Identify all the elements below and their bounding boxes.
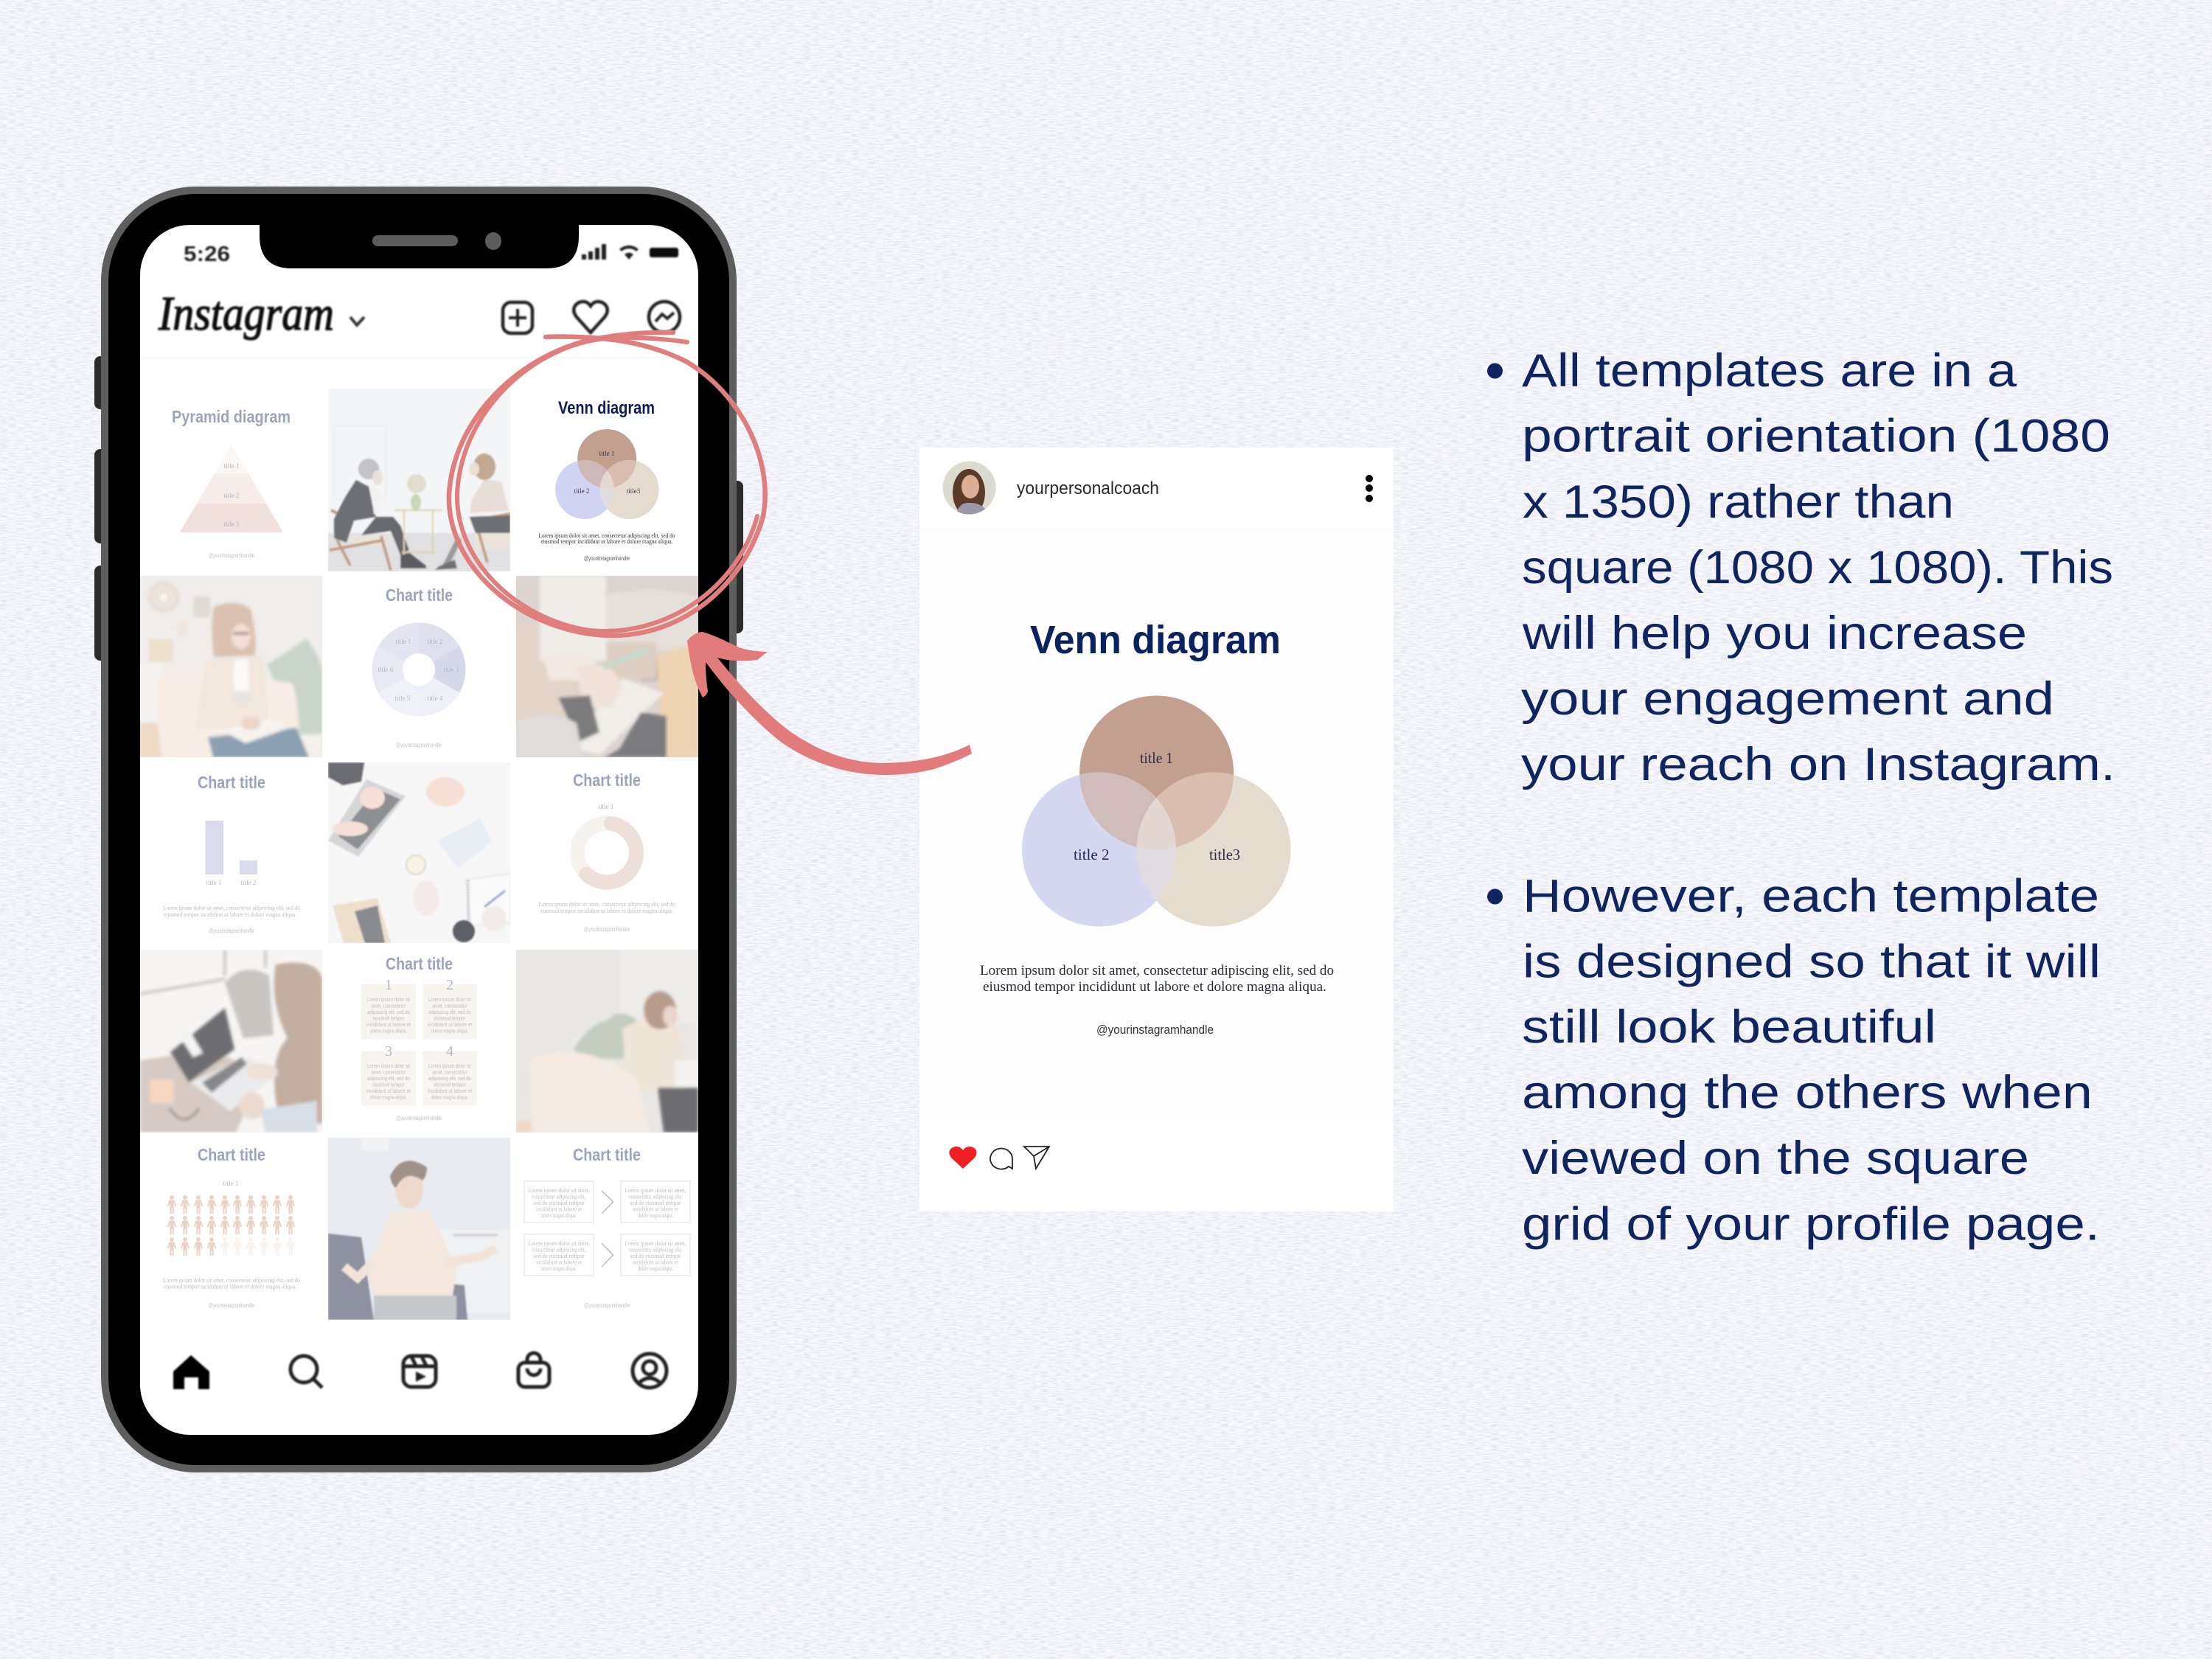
cell: progress ring: Lorem ipsum dolor sit amet, consectetur adipiscing elit, sed do — [538, 901, 675, 908]
cell: process boxes: incididunt ut labore et — [633, 1259, 679, 1265]
cell: donut chart — [372, 585, 466, 748]
bullet point one: your reach on Instagram. — [1521, 739, 2115, 790]
icon: profile — [633, 1354, 667, 1388]
hand-drawn circle highlight — [449, 333, 765, 636]
cell: process boxes: incididunt ut labore et — [536, 1259, 582, 1265]
bullet point two: is designed so that it will — [1523, 936, 2101, 988]
template grid — [140, 389, 698, 1320]
cell: progress ring: title 1 — [599, 803, 613, 810]
cell: process boxes: consectetur adipiscing elit, — [532, 1193, 585, 1200]
cell: pyramid diagram — [172, 407, 291, 559]
cell: process boxes: sed do eiusmod tempor — [630, 1200, 681, 1206]
cell: numbered boxes: adipiscing elit, sed do — [367, 1010, 410, 1015]
bullet point one — [1487, 345, 2115, 790]
cell: process boxes: @yourinstagramhandle — [584, 1301, 630, 1309]
notch — [260, 221, 579, 268]
cell: process boxes: Lorem ipsum dolor sit amet, — [528, 1187, 590, 1194]
cell: bar chart — [163, 773, 300, 934]
cell: process boxes: Lorem ipsum dolor sit amet, — [625, 1187, 686, 1194]
cell: bar chart: eiusmod tempor incididunt ut labore et dolore magna aliqua. — [164, 911, 296, 918]
cell: numbered boxes: 1 — [385, 977, 392, 993]
cell: process boxes — [524, 1145, 690, 1309]
cell: process boxes: Lorem ipsum dolor sit amet, — [528, 1240, 590, 1247]
icon: send — [1024, 1147, 1049, 1169]
icon: search — [291, 1356, 322, 1388]
cell: progress ring: eiusmod tempor incididunt ut labore et dolore magna aliqua. — [540, 908, 673, 914]
post caption: eiusmod tempor incididunt ut labore et dolore magna aliqua. — [983, 980, 1326, 995]
cell: bar chart: Chart title — [198, 773, 265, 792]
cell: process boxes: sed do eiusmod tempor — [534, 1200, 585, 1206]
status bar: 5:26 — [184, 243, 230, 266]
cell: bar chart: @yourinstagramhandle — [209, 927, 254, 934]
cell: process boxes: sed do eiusmod tempor — [630, 1253, 681, 1259]
venn diagram — [1018, 693, 1298, 929]
bullet point one: x 1350) rather than — [1523, 476, 1954, 528]
cell: numbered boxes: @yourinstagramhandle — [396, 1114, 442, 1121]
cell: pyramid diagram: @yourinstagramhandle — [209, 552, 254, 559]
venn diagram: title3 — [1209, 846, 1240, 863]
bullet point two: viewed on the square — [1522, 1133, 2029, 1184]
bullet point two: grid of your profile page. — [1522, 1199, 2100, 1251]
icon: reels — [403, 1356, 436, 1387]
cell: progress ring: Chart title — [573, 771, 641, 790]
cell: numbered boxes: Lorem ipsum dolor sit — [428, 1064, 471, 1069]
cell: pyramid diagram: Pyramid diagram — [172, 407, 291, 426]
curved arrow pointing to venn template — [687, 632, 972, 775]
photo: desk with laptop and flowers — [328, 762, 510, 943]
photo: hands writing in notebook — [516, 576, 698, 757]
cell: process boxes: consectetur adipiscing elit, — [628, 1193, 683, 1200]
photo: woman with laptop from behind — [140, 950, 322, 1133]
username: yourpersonalcoach — [1017, 479, 1159, 498]
faded people — [220, 1237, 295, 1256]
cell: numbered boxes: dolore magna aliqua. — [431, 1029, 468, 1034]
cell: pictogram chart — [163, 1145, 300, 1309]
cell: pyramid diagram: title 3 — [224, 521, 240, 528]
cell: process boxes: incididunt ut labore et — [536, 1206, 582, 1212]
cell: process boxes: sed do eiusmod tempor — [534, 1253, 585, 1259]
cell: numbered boxes: amet, consectetur — [372, 1004, 406, 1009]
side buttons — [94, 356, 743, 661]
bullet point one: your engagement and — [1521, 673, 2054, 725]
cell: numbered boxes: adipiscing elit, sed do — [428, 1077, 471, 1082]
bullet point two: among the others when — [1522, 1067, 2093, 1119]
status bar — [184, 243, 678, 266]
cell: numbered boxes: Lorem ipsum dolor sit — [367, 1064, 410, 1069]
cell: venn diagram small — [538, 398, 675, 562]
instagram app header: Instagram — [158, 287, 334, 341]
photo: woman seated beside plant — [516, 950, 698, 1133]
cell: numbered boxes: Lorem ipsum dolor sit — [428, 998, 471, 1003]
cell: numbered boxes: amet, consectetur — [432, 1071, 467, 1075]
cell: numbered boxes: incididunt ut labore et — [428, 1089, 472, 1094]
cell: bar chart: title 1 — [206, 879, 221, 886]
venn diagram: title 2 — [1074, 846, 1109, 863]
instagram post card — [919, 448, 1394, 1211]
phone mockup — [94, 190, 743, 1469]
cell: process boxes: Lorem ipsum dolor sit amet, — [625, 1240, 686, 1247]
post title: Venn diagram — [1030, 618, 1281, 662]
cell: pictogram chart: Chart title — [198, 1145, 265, 1164]
cell: numbered boxes: Lorem ipsum dolor sit — [367, 998, 410, 1003]
venn diagram: title 1 — [1140, 749, 1173, 767]
cell: donut chart: title 4 — [428, 695, 443, 702]
avatar photo — [942, 461, 997, 516]
cell: numbered boxes: incididunt ut labore et — [428, 1023, 472, 1028]
cell: pictogram chart: title 1 — [223, 1180, 238, 1187]
more menu dots — [1366, 475, 1373, 502]
people rows — [167, 1195, 295, 1256]
cell: numbered boxes: eiusmod tempor — [373, 1082, 405, 1088]
icon: home — [173, 1355, 209, 1389]
cell: process boxes: dolore magna aliqua. — [638, 1265, 673, 1272]
cell: numbered boxes: dolore magna aliqua. — [370, 1029, 407, 1034]
post caption: Lorem ipsum dolor sit amet, consectetur adipiscing elit, sed do — [980, 964, 1334, 978]
cell: process boxes: consectetur adipiscing elit, — [628, 1246, 683, 1253]
bullet list — [1487, 345, 2115, 1251]
cell: venn diagram small: eiusmod tempor incididunt ut labore et dolore magna aliqua. — [541, 538, 672, 545]
cell: venn diagram small: title 2 — [574, 487, 589, 495]
cell: pictogram chart: Lorem ipsum dolor sit amet, consectetur adipiscing elit, sed do — [163, 1277, 300, 1284]
cell: venn diagram small: Lorem ipsum dolor sit amet, consectetur adipiscing elit, sed do — [538, 532, 675, 539]
cell: progress ring: @yourinstagramhandle — [584, 925, 630, 933]
bullet point one: All templates are in a — [1522, 345, 2017, 397]
cell: venn diagram small: title 1 — [599, 450, 614, 457]
cell: process boxes: consectetur adipiscing elit, — [532, 1246, 585, 1253]
cell: pictogram chart: @yourinstagramhandle — [209, 1301, 254, 1309]
icon: shop — [518, 1353, 549, 1387]
cell: numbered boxes: dolore magna aliqua. — [431, 1096, 468, 1100]
bottom navigation bar — [173, 1353, 667, 1389]
cell: process boxes: dolore magna aliqua. — [541, 1265, 577, 1272]
speaker — [372, 235, 458, 246]
bullet point one: square (1080 x 1080). This — [1522, 542, 2113, 594]
cell: process boxes: dolore magna aliqua. — [638, 1212, 673, 1219]
cell: numbered boxes: 2 — [446, 977, 453, 993]
header divider — [140, 357, 698, 358]
icon: comment bubble — [990, 1149, 1012, 1169]
bullet point two: still look beautiful — [1522, 1001, 1936, 1053]
cell: donut chart: title 6 — [378, 666, 394, 673]
cell: numbered boxes: incididunt ut labore et — [366, 1023, 411, 1028]
cell: numbered boxes: eiusmod tempor — [373, 1016, 405, 1022]
post caption — [980, 964, 1334, 995]
cell: bar chart: Lorem ipsum dolor sit amet, consectetur adipiscing elit, sed do — [163, 905, 300, 911]
cell: numbered boxes: 4 — [446, 1043, 453, 1060]
photo: woman seated gesturing — [328, 1138, 510, 1320]
cell: numbered boxes — [361, 954, 477, 1121]
bullet point one: will help you increase — [1522, 608, 2027, 659]
bullet point two — [1487, 870, 2101, 1251]
cell: process boxes: dolore magna aliqua. — [541, 1212, 577, 1219]
bullet point one: portrait orientation (1080 — [1522, 410, 2110, 462]
cell: numbered boxes: incididunt ut labore et — [366, 1089, 411, 1094]
cell: venn diagram small: title3 — [627, 487, 641, 495]
post header — [919, 448, 1394, 528]
post action bar — [919, 1121, 1394, 1211]
cell: pictogram chart: eiusmod tempor incididunt ut labore et dolore magna aliqua. — [164, 1283, 296, 1290]
cell: pyramid diagram: title 2 — [224, 492, 239, 499]
photo: two women talking — [328, 389, 510, 571]
cell: donut chart: title 5 — [395, 695, 411, 702]
bullet point two: However, each template — [1523, 870, 2099, 922]
cell: venn diagram small: @yourinstagramhandle — [584, 554, 630, 562]
cell: process boxes: incididunt ut labore et — [633, 1206, 679, 1212]
cell: donut chart: Chart title — [386, 585, 453, 605]
phone body — [105, 190, 733, 1469]
cell: numbered boxes: adipiscing elit, sed do — [367, 1077, 410, 1082]
cell: numbered boxes: amet, consectetur — [432, 1004, 467, 1009]
cell: process boxes: Chart title — [573, 1145, 641, 1164]
cell: numbered boxes: eiusmod tempor — [434, 1016, 466, 1022]
cell: bar chart: title 2 — [241, 879, 256, 886]
cell: numbered boxes: adipiscing elit, sed do — [428, 1010, 471, 1015]
cell: donut chart: title 3 — [444, 666, 459, 673]
photo: woman writing in armchair — [140, 576, 322, 757]
cell: numbered boxes: 3 — [385, 1043, 392, 1060]
cell: numbered boxes: dolore magna aliqua. — [370, 1096, 407, 1100]
cell: donut chart: @yourinstagramhandle — [396, 741, 442, 748]
cell: numbered boxes: eiusmod tempor — [434, 1082, 466, 1088]
cell: progress ring — [538, 771, 675, 933]
icon: red heart — [949, 1147, 977, 1169]
instagram app header — [158, 287, 680, 341]
cell: numbered boxes: amet, consectetur — [372, 1071, 406, 1075]
cell: donut chart: title 2 — [428, 638, 442, 645]
cell: venn diagram small: Venn diagram — [558, 398, 655, 418]
cell: donut chart: title 1 — [396, 638, 411, 645]
post handle: @yourinstagramhandle — [1096, 1023, 1214, 1037]
camera — [485, 232, 501, 250]
screen — [140, 225, 698, 1435]
cell: pyramid diagram: title 1 — [224, 462, 239, 470]
cell: numbered boxes: Chart title — [386, 954, 453, 973]
